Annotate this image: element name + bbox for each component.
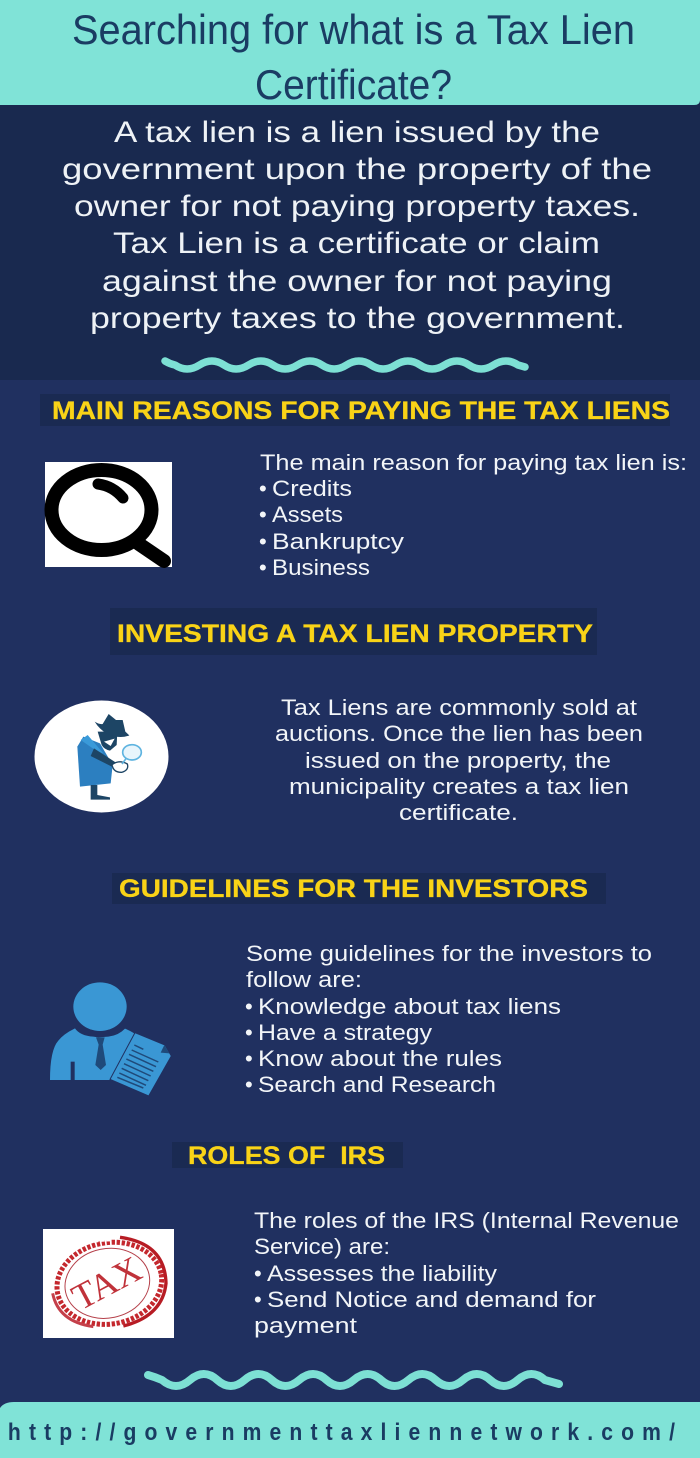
text: IRS roles list: •	[254, 1261, 262, 1286]
text: investing paragraph: Tax Liens are commonly sold at	[281, 695, 637, 720]
text: investing paragraph: municipality creates a tax lien	[289, 774, 629, 799]
heading: investing: INVESTING A TAX LIEN PROPERTY	[117, 620, 593, 648]
title banner	[0, 0, 700, 108]
text: investing paragraph: auctions. Once the lien has been	[275, 721, 643, 746]
intro text block: owner for not paying property taxes.	[74, 190, 640, 223]
icon: tax stamp	[43, 1229, 174, 1338]
icon: magnifying glass	[45, 462, 172, 567]
icon: tax stamp: TAX	[65, 1248, 148, 1318]
heading: guidelines: GUIDELINES FOR THE INVESTORS	[119, 875, 588, 903]
intro text block	[62, 116, 652, 335]
section: investing	[34, 608, 643, 825]
intro text block: A tax lien is a lien issued by the	[114, 116, 600, 149]
wave divider: top	[165, 361, 525, 369]
intro text block: Tax Lien is a certificate or claim	[113, 227, 600, 260]
text: guidelines list: •	[245, 994, 253, 1019]
text: IRS roles list: payment	[254, 1313, 357, 1338]
section: roles of IRS	[43, 1142, 679, 1338]
section: main reasons	[40, 394, 687, 580]
heading: main reasons: MAIN REASONS FOR PAYING THE TAX LIENS	[52, 397, 670, 425]
intro text block: property taxes to the government.	[90, 302, 625, 335]
title text	[72, 6, 635, 108]
text: guidelines list	[245, 941, 652, 1097]
heading: investing	[110, 608, 597, 655]
text: investing paragraph: issued on the property, the	[305, 748, 611, 773]
text: IRS roles list: Service) are:	[254, 1234, 390, 1259]
text: guidelines list: Know about the rules	[258, 1046, 502, 1071]
text: main reasons list: Credits	[272, 476, 352, 501]
text: guidelines list: •	[245, 1072, 253, 1097]
text: guidelines list: Have a strategy	[258, 1020, 432, 1045]
footer url: http://governmenttaxliennetwork.com/	[8, 1419, 676, 1445]
text: main reasons list: Assets	[272, 502, 343, 527]
text: guidelines list: Knowledge about tax liens	[258, 994, 561, 1019]
text: guidelines list: •	[245, 1020, 253, 1045]
icon: person with document	[50, 982, 171, 1096]
text: investing paragraph	[275, 695, 643, 825]
text: IRS roles list	[254, 1208, 679, 1338]
text: IRS roles list: Send Notice and demand for	[267, 1287, 596, 1312]
text: main reasons list: •	[259, 555, 267, 580]
text: main reasons list: Business	[272, 555, 370, 580]
text: main reasons list: •	[259, 476, 267, 501]
text: IRS roles list: The roles of the IRS (Internal Revenue	[254, 1208, 679, 1233]
text: guidelines list: •	[245, 1046, 253, 1071]
intro text block: against the owner for not paying	[102, 265, 612, 298]
title text: Certificate?	[255, 61, 452, 108]
text: guidelines list: Some guidelines for the investors to	[246, 941, 652, 966]
intro panel background	[0, 100, 700, 380]
text: guidelines list: follow are:	[246, 967, 362, 992]
title text: Searching for what is a Tax Lien	[72, 6, 635, 53]
text: main reasons list: Bankruptcy	[272, 529, 404, 554]
section: guidelines	[50, 873, 652, 1097]
text: main reasons list	[259, 450, 687, 580]
text: main reasons list: The main reason for paying tax lien is:	[260, 450, 687, 475]
icon: detective	[34, 700, 168, 812]
text: IRS roles list: •	[254, 1287, 262, 1312]
text: main reasons list: •	[259, 529, 267, 554]
text: IRS roles list: Assesses the liability	[267, 1261, 497, 1286]
wave divider: bottom	[148, 1374, 559, 1386]
footer banner	[0, 1402, 700, 1458]
text: main reasons list: •	[259, 502, 267, 527]
intro text block: government upon the property of the	[62, 153, 652, 186]
text: guidelines list: Search and Research	[258, 1072, 496, 1097]
heading: roles of IRS: ROLES OF IRS	[188, 1142, 385, 1170]
text: investing paragraph: certificate.	[399, 800, 518, 825]
